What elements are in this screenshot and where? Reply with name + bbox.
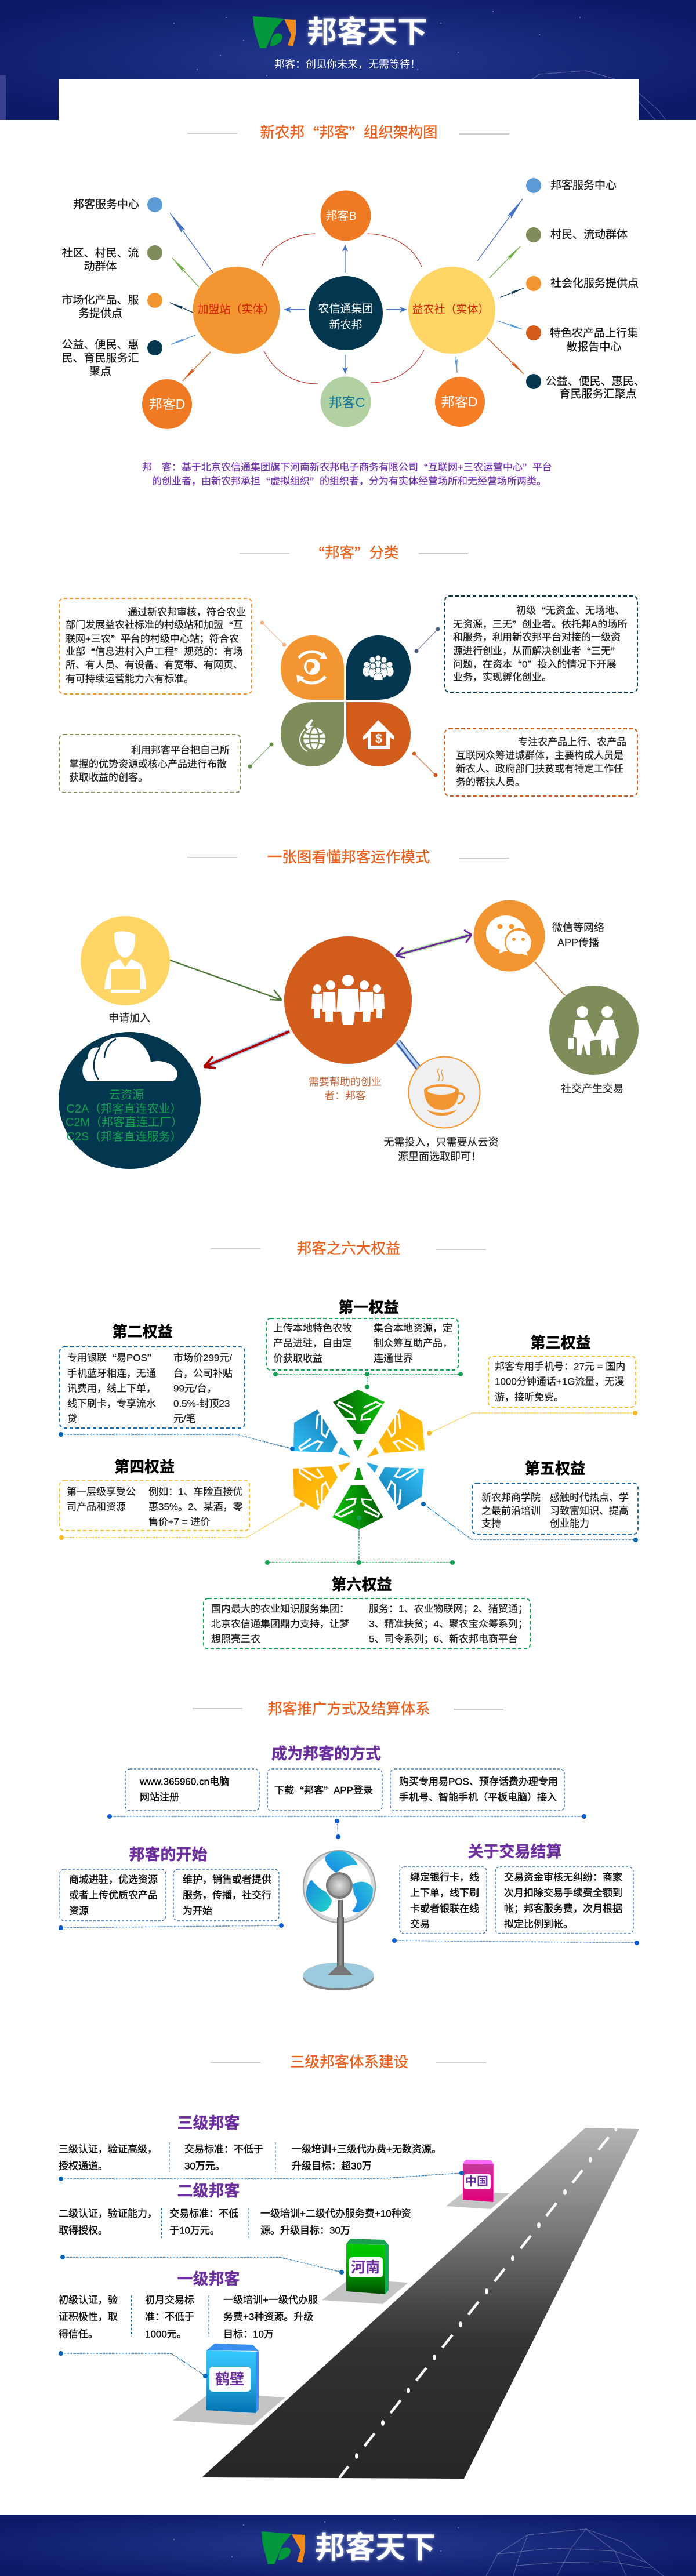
right 5 xyxy=(421,1460,638,1542)
arrow: red xyxy=(204,1031,289,1068)
hexagon flower xyxy=(293,1390,425,1529)
arrow: two-way purple xyxy=(396,930,472,958)
heading: org chart: 新农邦“邦客”组织架构图 xyxy=(260,122,438,144)
right 2: 台，公司补贴 xyxy=(173,1368,233,1379)
right items: 育民服务汇聚点 xyxy=(559,387,637,400)
right 3: 邦客专用手机号：27元 = 国内 xyxy=(495,1361,625,1372)
panel: the start: 维护，销售或者提供 xyxy=(183,1874,271,1885)
connector: navy xyxy=(414,627,440,653)
node: 邦客C: 邦客C xyxy=(329,395,365,410)
footer brand name: 邦客天下 xyxy=(315,2531,436,2565)
right 2: 元/笔 xyxy=(173,1414,196,1424)
node: 邦客B xyxy=(320,190,371,241)
circle: cloud resource: C2M（邦客直连工厂） xyxy=(66,1116,183,1129)
right 2: 贷 xyxy=(67,1414,77,1424)
node: 农信通集团 新农邦: 农信通集团 xyxy=(318,303,374,315)
panel: orange classification text: 所、有人员、有设备、有宽带、有网页、 xyxy=(66,660,243,670)
right 4: 售价÷7 = 进价 xyxy=(148,1517,210,1527)
right 6: 北京农信通集团鼎力支持，让梦 xyxy=(211,1619,349,1629)
tier 2: 取得授权。 xyxy=(59,2225,108,2236)
text: coffee xyxy=(384,1136,499,1162)
right 6: 3、精准扶贫；4、聚农宝众筹系列； xyxy=(369,1619,528,1629)
tier 1: 初月交易标 xyxy=(145,2295,194,2305)
node: 农信通集团 新农邦: 新农邦 xyxy=(329,319,362,332)
left items: 邦客服务中心 xyxy=(73,198,139,211)
panel: settlement xyxy=(392,1843,639,1945)
heading: classification: “邦客”分类 xyxy=(310,543,399,564)
tier 1 xyxy=(59,2270,318,2378)
node: 加盟站: 加盟站（实体） xyxy=(197,303,275,315)
panel: orange classification text xyxy=(59,598,252,694)
panel: the start: 资源 xyxy=(69,1905,89,1917)
definition text xyxy=(142,460,552,488)
heading: three-tier: 三级邦客体系建设 xyxy=(290,2054,408,2070)
text: wechat xyxy=(552,922,604,949)
node: 邦客D left: 邦客D xyxy=(149,397,185,412)
tier 2: 于10万元。 xyxy=(169,2225,220,2236)
panel: rust classification text: 新农人、政府部门扶贫或有特定工作任 xyxy=(456,763,624,775)
circle: cloud resource: 云资源 xyxy=(109,1088,144,1102)
right 6: 5、司令系列；6、新农邦电商平台 xyxy=(369,1634,518,1644)
panel: settlement: 拟定比例到帐。 xyxy=(504,1919,573,1930)
right 2: 0.5%-封顶23 xyxy=(173,1398,230,1409)
tier 1: 一级邦客 xyxy=(177,2270,240,2288)
panel: settlement: 帐；邦客服务费，次月根据 xyxy=(504,1903,622,1914)
left items: 市场化产品、服 xyxy=(61,293,139,306)
right 6 xyxy=(204,1516,530,1649)
right 6: 国内最大的农业知识服务集团： xyxy=(211,1604,349,1614)
node: 益农社 xyxy=(408,267,495,354)
text: startup: 者：邦客 xyxy=(324,1090,366,1102)
right 1: 价获取收益 xyxy=(273,1353,322,1364)
panel: settlement: 绑定银行卡，线 xyxy=(410,1872,479,1883)
right 4: 例如：1、车险直接优 xyxy=(148,1487,242,1497)
panel: olive classification text: 利用邦客平台把自己所 xyxy=(131,744,230,756)
right 2: 讯费用，线上下单， xyxy=(67,1383,156,1394)
right items: 特色农产品上行集 xyxy=(550,327,638,340)
right 3 xyxy=(427,1334,637,1436)
tier 2: 二级邦客 xyxy=(177,2182,240,2200)
right items: 社会化服务提供点 xyxy=(550,277,639,290)
right items xyxy=(526,178,645,400)
text: apply to join: 申请加入 xyxy=(108,1012,150,1024)
right items: 散报告中心 xyxy=(566,341,622,354)
circle: cloud resource xyxy=(59,1032,201,1169)
signpost: 中国 xyxy=(446,2160,509,2209)
tier 3: 交易标准：不低于 xyxy=(184,2144,263,2154)
panel: the start: 为开始 xyxy=(183,1905,212,1917)
panel: settlement: 卡或者银联在线 xyxy=(410,1903,479,1914)
org chart xyxy=(61,178,645,429)
right 3: 第三权益 xyxy=(530,1334,591,1351)
footer banner xyxy=(0,2515,696,2576)
left items: 务提供点 xyxy=(78,307,122,320)
node: 邦客C xyxy=(320,377,371,427)
panel: how to become: www.365960.cn电脑 xyxy=(139,1776,229,1787)
right 4: 第四权益 xyxy=(114,1458,175,1476)
node: 农信通集团 新农邦 xyxy=(309,276,383,350)
circle: apply to join xyxy=(81,916,170,1005)
tier 2: 交易标准：不低 xyxy=(169,2208,238,2219)
panel: rust classification text xyxy=(445,729,637,796)
right 1: 集合本地资源，定 xyxy=(374,1323,452,1334)
header banner xyxy=(0,0,696,120)
right 4: 司产品和资源 xyxy=(67,1502,126,1512)
heading: operating model: 一张图看懂邦客运作模式 xyxy=(267,849,430,866)
footer logo xyxy=(262,2531,305,2564)
right 1: 上传本地特色农牧 xyxy=(273,1323,352,1334)
slogan: 邦客：创见你未来，无需等待！ xyxy=(274,59,420,70)
logo xyxy=(253,16,296,48)
tier 3: 三级邦客 xyxy=(177,2114,240,2132)
definition text: 的创业者，由新农邦承担“虚拟组织”的组织者，分为有实体经营场所和无经营场所两类。 xyxy=(152,474,546,488)
text: social trade: 社交产生交易 xyxy=(561,1083,624,1095)
left items: 社区、村民、流 xyxy=(61,247,139,260)
right 5: 新农邦商学院 xyxy=(481,1492,541,1503)
node: 邦客D left xyxy=(142,379,192,429)
petal: orange xyxy=(281,635,344,700)
text: startup: 需要帮助的创业 xyxy=(309,1076,382,1088)
right 5: 创业能力 xyxy=(550,1518,589,1529)
text: wechat: 微信等网络 xyxy=(552,922,604,933)
panel: how to become: 手机号、智能手机（平板电脑）接入 xyxy=(399,1792,557,1803)
heading: six rights: 邦客之六大权益 xyxy=(297,1241,400,1257)
panel: olive classification text: 掌握的优势资源或核心产品进行布散 xyxy=(69,758,227,770)
panel: rust classification text: 互联网众筹进城群体，主要构成人员是 xyxy=(456,750,624,761)
panel: navy classification text: 无资源，三无”创业者。依托邦A的场所 xyxy=(453,617,627,632)
panel: how to become: 成为邦客的方式 xyxy=(271,1745,381,1763)
right 2: 专用银联“易POS” xyxy=(67,1351,157,1365)
signpost: 中国: 中国 xyxy=(465,2175,488,2188)
road xyxy=(202,2127,639,2479)
connector: rust xyxy=(412,751,437,777)
tier 1: 证积极性，取 xyxy=(59,2311,118,2323)
tier 1: 1000元。 xyxy=(145,2328,187,2340)
red connection arcs xyxy=(262,234,424,384)
panel: the start: 或者上传优质农产品 xyxy=(69,1890,158,1901)
panel: navy classification text xyxy=(445,596,637,692)
four-petal diagram xyxy=(281,635,411,766)
circle: social trade xyxy=(549,986,639,1075)
left items xyxy=(61,197,162,378)
right 1: 连通世界 xyxy=(374,1353,413,1364)
signpost: 河南 xyxy=(322,2239,408,2304)
right 2: 线下刷卡，专享流水 xyxy=(67,1398,156,1409)
arrows xyxy=(170,199,524,381)
line: social xyxy=(535,962,565,995)
right items: 村民、流动群体 xyxy=(550,228,628,241)
right 1: 产品进驻，自由定 xyxy=(273,1338,352,1349)
tier 1: 得信任。 xyxy=(59,2328,98,2340)
panel: navy classification text: 业务，实现孵化创业。 xyxy=(453,671,552,683)
tier 3: 授权通道。 xyxy=(59,2160,108,2172)
connector: olive xyxy=(248,742,274,769)
panel: the start xyxy=(59,1846,284,1930)
node: 益农社: 益农社（实体） xyxy=(412,303,490,315)
right 2: 手机蓝牙相连，无通 xyxy=(67,1368,156,1379)
panel: navy classification text: 初级“无资金、无场地、 xyxy=(516,603,625,618)
panel: orange classification text: 联网+三农”平台的村级中心站；符合农 xyxy=(66,632,239,646)
tier 1: 初级认证，验 xyxy=(59,2295,118,2305)
right 2: 第二权益 xyxy=(112,1323,173,1340)
circle: cloud resource: C2A（邦客直连农业） xyxy=(67,1102,182,1116)
right 6: 服务：1、农业物联网；2、猪贸通； xyxy=(369,1604,528,1614)
panel: how to become: 购买专用易POS、预存话费办理专用 xyxy=(399,1776,558,1787)
right 5: 支持 xyxy=(481,1518,501,1529)
panel: settlement: 上下单，线下刷 xyxy=(410,1888,479,1898)
operating model diagram xyxy=(59,900,639,1169)
panel: the start: 商城进驻，优选资源 xyxy=(69,1874,158,1885)
panel: navy classification text: 源进行创业，从而解决创业者“三无” xyxy=(453,644,621,659)
right 3: 游，接听免费。 xyxy=(495,1391,564,1403)
right items: 邦客服务中心 xyxy=(550,179,617,191)
text: coffee: 源里面选取即可！ xyxy=(398,1151,481,1162)
panel: olive classification text xyxy=(59,735,241,793)
circle: startup people xyxy=(284,936,412,1064)
right 4: 惠35%。2、某酒，零 xyxy=(148,1502,242,1512)
petal: rust: $ xyxy=(375,732,382,746)
panel: orange classification text: 业部“信息进村入户工程”规范的：有场 xyxy=(66,645,243,659)
tier 1: 一级培训+一级代办服 xyxy=(223,2295,318,2305)
right 5: 之最前沿培训 xyxy=(481,1505,541,1517)
petal: olive xyxy=(281,702,344,766)
text: wechat: APP传播 xyxy=(557,937,599,949)
right 2: 市场价299元/ xyxy=(173,1352,232,1364)
panel: settlement: 交易资金审核无纠纷：商家 xyxy=(504,1872,622,1883)
node: 邦客D right: 邦客D xyxy=(441,394,477,409)
right 2 xyxy=(59,1323,295,1451)
text: startup xyxy=(309,1076,382,1102)
tier 2: 源。升级目标：30万 xyxy=(260,2225,350,2236)
panel: how to become xyxy=(107,1745,586,1839)
tier 3: 三级认证，验证高级， xyxy=(59,2144,157,2154)
tier 3: 30万元。 xyxy=(184,2160,225,2172)
circle: cloud resource: C2S（邦客直连服务） xyxy=(67,1130,182,1143)
circle: coffee xyxy=(408,1056,480,1128)
tier 2: 一级培训+二级代办服务费+10种资 xyxy=(260,2208,411,2219)
panel: the start: 邦客的开始 xyxy=(129,1846,208,1863)
panel: how to become: 网站注册 xyxy=(140,1792,179,1803)
panel: orange classification text: 通过新农邦审核，符合农业 xyxy=(128,606,246,618)
panel: orange classification text: 部门发展益农社标准的村级站和加盟“互 xyxy=(66,618,243,632)
node: 加盟站 xyxy=(193,267,280,354)
node: 邦客D right xyxy=(435,377,485,427)
panel: olive classification text: 获取收益的创客。 xyxy=(69,772,148,783)
left items: 动群体 xyxy=(84,260,117,273)
panel: orange classification text: 有可持续运营能力六有标准。 xyxy=(66,674,194,684)
tier 2: 二级认证，验证能力， xyxy=(59,2208,157,2219)
heading: promotion: 邦客推广方式及结算体系 xyxy=(267,1701,430,1717)
text: coffee: 无需投入，只需要从云资 xyxy=(384,1136,499,1148)
left items: 公益、便民、惠 xyxy=(61,339,139,351)
panel: settlement: 关于交易结算 xyxy=(467,1843,561,1861)
right 1 xyxy=(266,1299,463,1389)
panel: navy classification text: 问题，在资本“0”投入的情况下开展 xyxy=(453,657,616,671)
icon: electric fan xyxy=(303,1851,375,1990)
brand name: 邦客天下 xyxy=(307,16,427,49)
left items: 聚点 xyxy=(89,365,111,378)
right 1: 制众筹互助产品， xyxy=(374,1338,452,1349)
panel: settlement: 次月扣除交易手续费全额到 xyxy=(504,1888,622,1898)
tier 1: 务费+3种资源。升级 xyxy=(223,2311,313,2323)
connector: orange xyxy=(260,620,287,647)
panel: the start: 服务，传播，社交行 xyxy=(183,1890,271,1901)
arrow: apply xyxy=(170,960,282,1000)
tier 3: 升级目标：超30万 xyxy=(292,2160,372,2172)
right 5: 习致富知识、提高 xyxy=(550,1505,629,1517)
tier 3: 一级培训+三级代办费+无数资源。 xyxy=(292,2144,441,2154)
petal: rust xyxy=(346,702,411,766)
left items: 民、育民服务汇 xyxy=(61,351,139,364)
panel: settlement: 交易 xyxy=(410,1919,430,1930)
panel: rust classification text: 专注农产品上行、农产品 xyxy=(518,736,626,748)
definition text: 邦 客：基于北京农信通集团旗下河南新农邦电子商务有限公司“互联网+三农运营中心”平台 xyxy=(142,460,552,474)
right 6: 第六权益 xyxy=(331,1576,392,1593)
right 4 xyxy=(59,1458,304,1540)
line: blue stripes xyxy=(396,1040,420,1070)
right 5: 感触时代热点、学 xyxy=(550,1492,629,1503)
circle: wechat xyxy=(473,900,545,972)
right 3: 1000分钟通话+1G流量，无漫 xyxy=(495,1376,624,1387)
signpost: 河南: 河南 xyxy=(351,2259,380,2276)
tier 2 xyxy=(59,2182,411,2275)
signpost: 鹤壁 xyxy=(173,2344,285,2425)
panel: how to become: 下载“邦客”APP登录 xyxy=(274,1783,373,1797)
right 6: 想照亮三农 xyxy=(211,1634,260,1644)
signpost: 鹤壁: 鹤壁 xyxy=(215,2371,244,2388)
petal: navy xyxy=(346,635,411,700)
right items: 公益、便民、惠民、 xyxy=(545,375,645,387)
panel: navy classification text: 和服务，利用新农邦平台对接的一级资 xyxy=(453,632,621,642)
tier 1: 准：不低于 xyxy=(145,2311,194,2323)
right 5: 第五权益 xyxy=(525,1460,585,1477)
tier 3 xyxy=(59,2114,464,2181)
right 1: 第一权益 xyxy=(338,1299,399,1316)
right 2: 99元/台， xyxy=(173,1383,217,1394)
node: 邦客B: 邦客B xyxy=(325,209,357,223)
panel: rust classification text: 务的帮扶人员。 xyxy=(456,777,525,787)
tier 1: 目标：10万 xyxy=(223,2328,274,2340)
right 4: 第一层级享受公 xyxy=(67,1487,136,1497)
